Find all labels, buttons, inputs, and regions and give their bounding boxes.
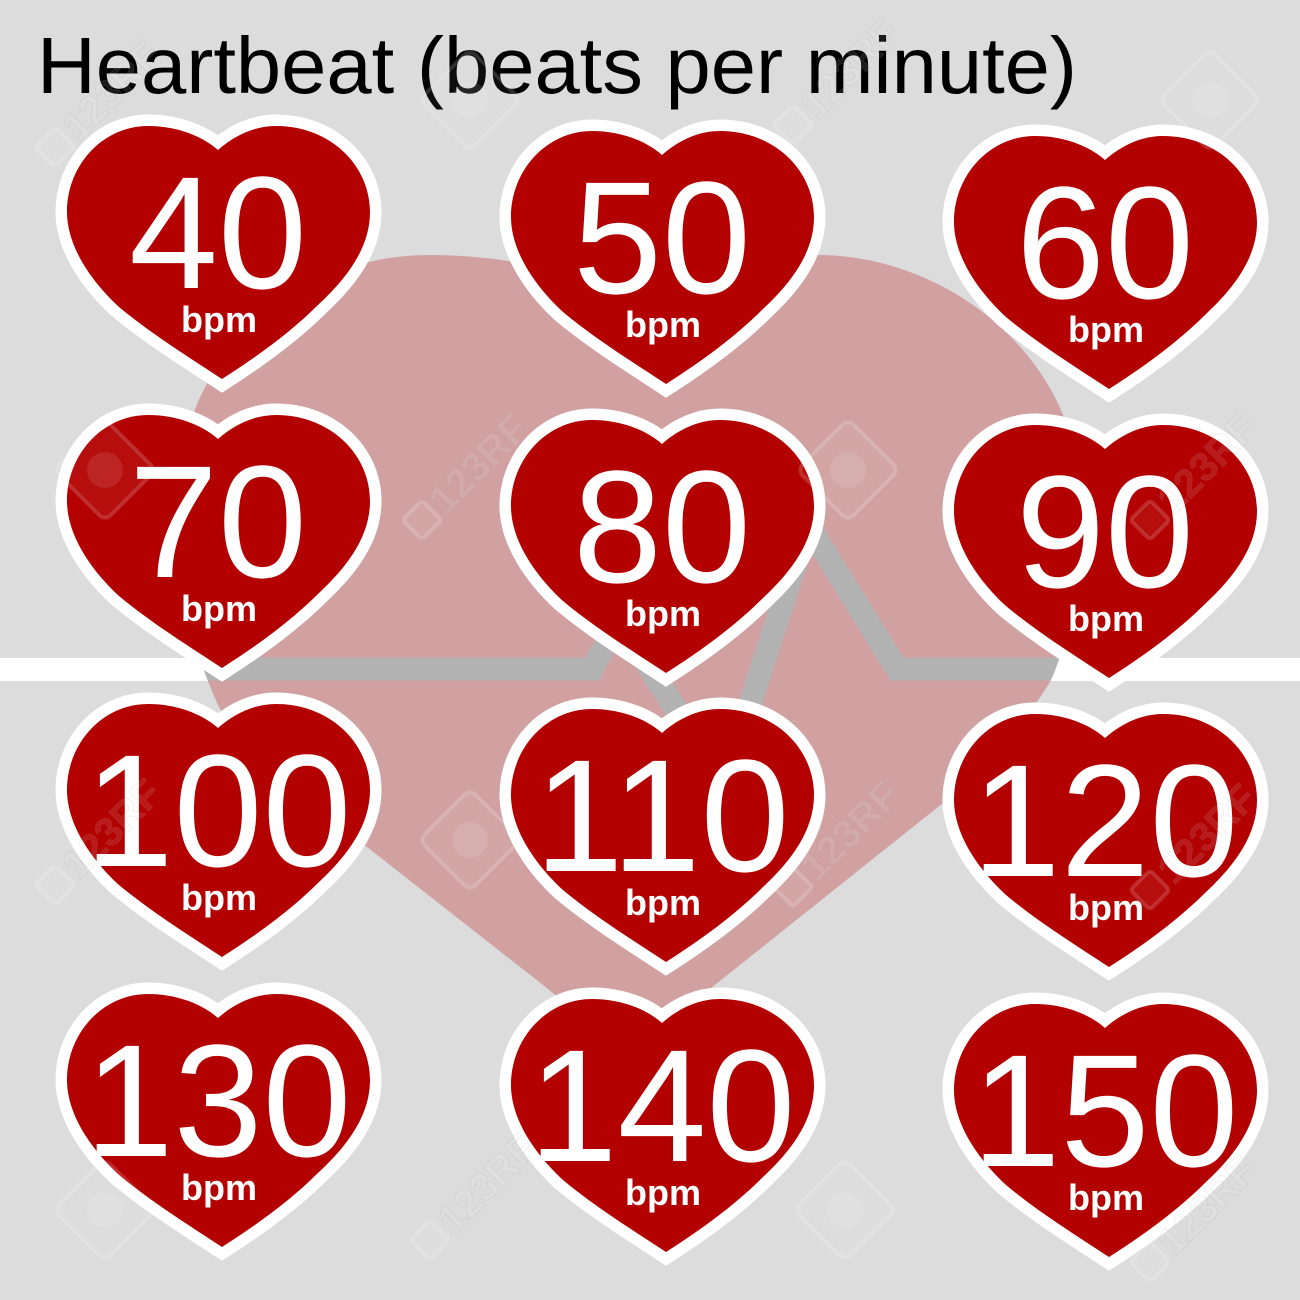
heart: 120 bpm: bpm: [1068, 887, 1144, 928]
heart: 140 bpm: 140: [529, 1016, 795, 1195]
heart: 60 bpm: [954, 136, 1257, 389]
heart: 50 bpm: 50: [573, 148, 751, 327]
heart: 140 bpm: bpm: [625, 1172, 701, 1213]
heart: 150 bpm: [954, 1004, 1257, 1257]
heart: 40 bpm: bpm: [181, 299, 257, 340]
heart: 40 bpm: 40: [129, 143, 307, 322]
heart: 100 bpm: bpm: [181, 877, 257, 918]
heart: 140 bpm: [511, 999, 814, 1252]
heart: 80 bpm: 80: [573, 437, 751, 616]
watermarks: 123RF: [1149, 1148, 1265, 1264]
title: Heartbeat (beats per minute): [37, 21, 1077, 110]
heart: 60 bpm: bpm: [1068, 309, 1144, 350]
heart: 70 bpm: 70: [129, 432, 307, 611]
watermarks: 123RF: [429, 1126, 545, 1242]
heart: 110 bpm: bpm: [625, 882, 701, 923]
heart: 120 bpm: 120: [972, 731, 1238, 910]
white horizontal band: [0, 658, 1300, 681]
heart: 90 bpm: bpm: [1068, 598, 1144, 639]
watermarks: 123RF: [1149, 406, 1265, 522]
heart: 150 bpm: 150: [972, 1021, 1238, 1200]
heart: 130 bpm: [67, 994, 370, 1247]
heart: 90 bpm: 90: [1016, 442, 1194, 621]
heart: 60 bpm: 60: [1016, 153, 1194, 332]
heart: 40 bpm: [67, 126, 370, 379]
heart: 100 bpm: [67, 704, 370, 957]
heart: 130 bpm: bpm: [181, 1167, 257, 1208]
watermarks: 123RF: [792, 773, 908, 889]
heart: 110 bpm: [511, 709, 814, 962]
heart: 130 bpm: 130: [85, 1011, 351, 1190]
heart: 110 bpm: 110: [534, 726, 790, 905]
heart: 80 bpm: [511, 420, 814, 673]
heart: 100 bpm: 100: [85, 721, 351, 900]
watermarks: 123RF: [792, 11, 908, 127]
heart: 90 bpm: [954, 425, 1257, 678]
heart: 50 bpm: bpm: [625, 304, 701, 345]
watermarks: 123RF: [421, 406, 537, 522]
heart: 50 bpm: [511, 131, 814, 384]
heart: 150 bpm: bpm: [1068, 1177, 1144, 1218]
watermarks: 123RF: [54, 771, 170, 887]
heart: 70 bpm: bpm: [181, 588, 257, 629]
big background heart: [178, 255, 1080, 1054]
heart: 120 bpm: [954, 714, 1257, 967]
watermarks: 123RF: [54, 33, 170, 149]
heart: 80 bpm: bpm: [625, 593, 701, 634]
ECG pulse line: [204, 528, 1059, 716]
heart: 70 bpm: [67, 415, 370, 668]
watermarks: 123RF: [1149, 776, 1265, 892]
